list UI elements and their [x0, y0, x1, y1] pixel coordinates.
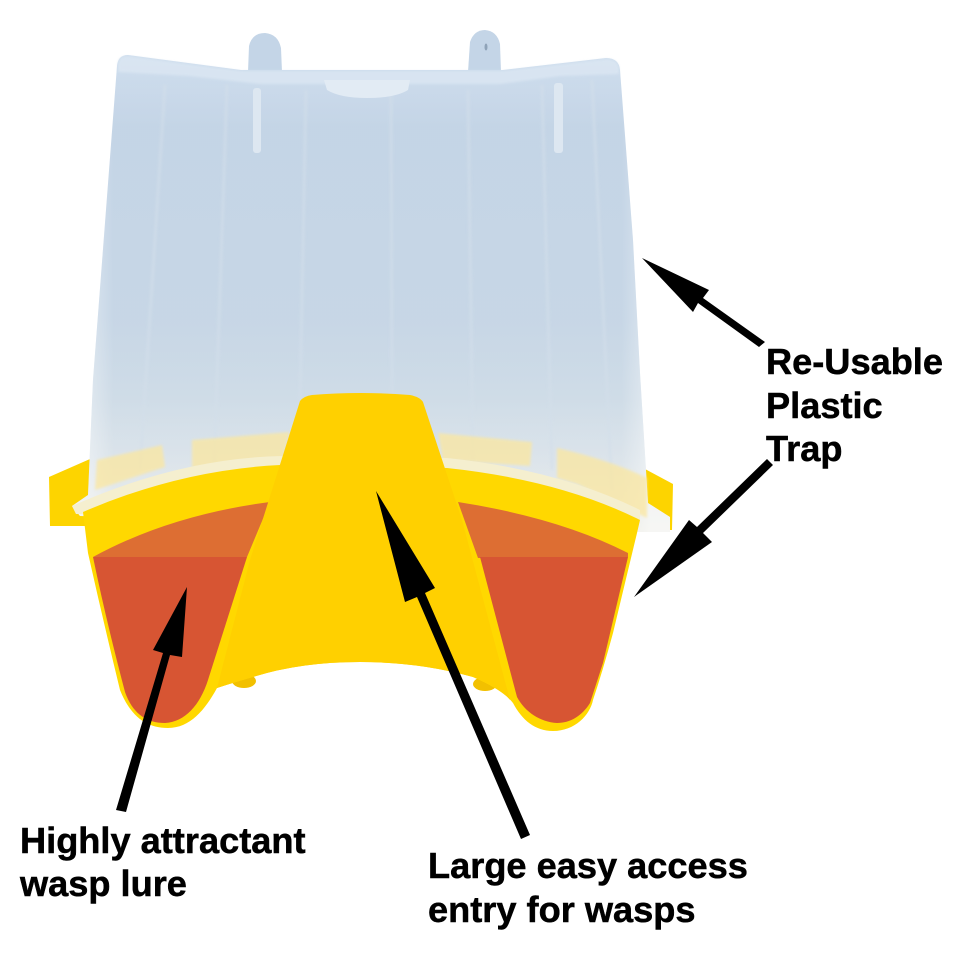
yellow show-through patches: [95, 432, 647, 518]
yellow rim tab right: [645, 469, 673, 530]
label: large easy access entry: Large easy access: [428, 845, 748, 886]
central yellow entry cone: [217, 393, 510, 700]
container edge highlight: [72, 55, 670, 532]
inner pegs: [253, 83, 563, 153]
label: highly attractant wasp lure: Highly attractant: [20, 820, 306, 861]
yellow rim tab left: [49, 459, 90, 526]
label: re-usable plastic trap: Re-Usable: [766, 341, 943, 382]
label: re-usable plastic trap: [766, 341, 943, 469]
hanging tab hole: [484, 44, 488, 50]
lure liquid upper left: [93, 502, 270, 557]
arrow: to lure: [116, 587, 187, 812]
label: highly attractant wasp lure: [19, 820, 306, 904]
arrow: to plastic top: [642, 258, 765, 347]
label: large easy access entry: entry for wasps: [428, 889, 695, 930]
wasp trap product: [49, 30, 673, 731]
arrow: to entry: [376, 491, 530, 839]
label: re-usable plastic trap: Plastic: [766, 385, 883, 426]
label: large easy access entry: [428, 845, 748, 930]
top lid highlight: [324, 80, 410, 98]
container vertical ribs: [140, 80, 612, 490]
label: re-usable plastic trap: Trap: [766, 428, 842, 469]
icon: hanging tabs: [248, 30, 501, 72]
cream rim lip: [72, 456, 640, 520]
yellow base: [83, 465, 640, 731]
arrow: to plastic bottom: [634, 459, 773, 597]
lure liquid lower right: [480, 557, 628, 723]
lure liquid lower left: [93, 557, 247, 723]
top rim band: [118, 56, 619, 84]
feet: [232, 674, 497, 691]
lure liquid upper right: [458, 502, 628, 558]
label: highly attractant wasp lure: wasp lure: [19, 863, 187, 904]
transparent plastic container: [72, 55, 670, 532]
